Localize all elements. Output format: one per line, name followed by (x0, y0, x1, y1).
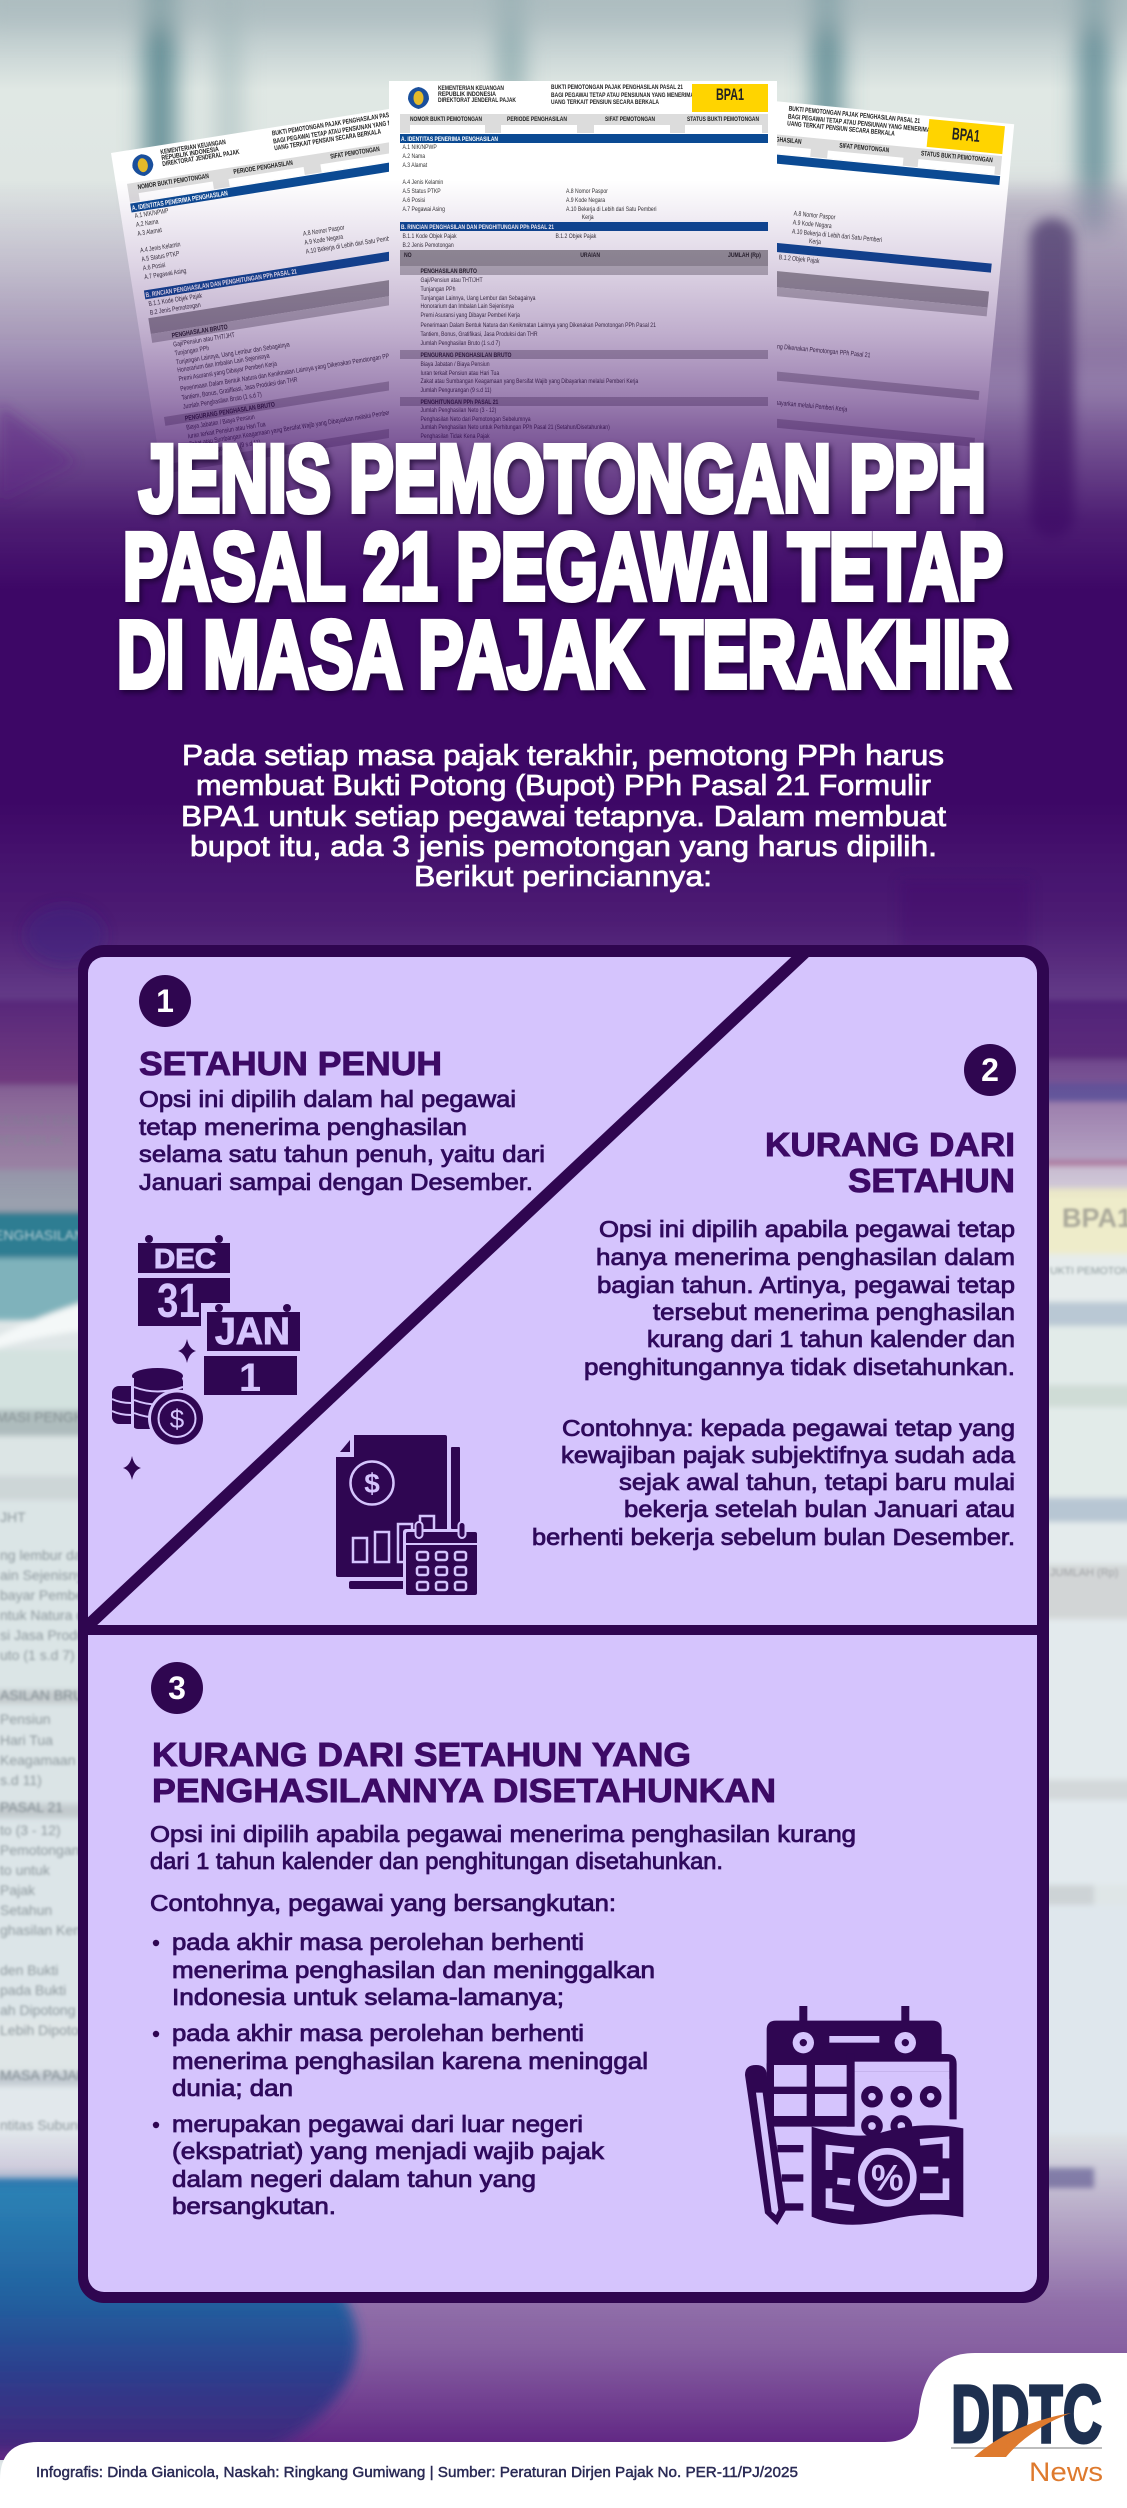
blurred form text, left strip (0, 1112, 147, 2133)
form BPA1: center sheet: REPUBLIK INDONESIA (438, 91, 496, 98)
heading 1: SETAHUN PENUH (139, 1045, 442, 1082)
form BPA1: center sheet: NO (404, 252, 412, 259)
panel fill (88, 957, 1037, 2292)
form BPA1: center sheet: Penerimaan Dalam Bentuk Natura dan Kenikmatan Lainnya yang Dikenakan Pemotongan PPh Pasal 21 (421, 322, 657, 329)
blurred form text, left strip: si Jasa Produksi (0, 1627, 102, 1643)
form BPA1: left sheet: PERIODE PENGHASILAN (233, 160, 293, 176)
blurred form text, left strip: ng lembur dan (0, 1547, 90, 1563)
form BPA1: right sheet: SIFAT PEMOTONGAN (839, 143, 889, 154)
blurred form text, left strip: Pensiun (0, 1711, 51, 1727)
form BPA1: left sheet: A.3 Alamat (137, 227, 163, 238)
blue bottom-left blob (0, 2180, 357, 2450)
form BPA1: center sheet: PENGURANG PENGHASILAN BRUTO (421, 352, 512, 359)
logo: DDTC News (951, 2369, 1103, 2487)
body text 2: berhenti bekerja sebelum bulan Desember. (532, 1524, 1015, 1550)
number badge 3: 3 (168, 1670, 186, 1706)
body text 2: penghitungannya tidak disetahunkan. (584, 1354, 1015, 1380)
number badge 2 (964, 1044, 1016, 1096)
form BPA1: center sheet: A.7 Pegawai Asing (402, 206, 445, 213)
footer white tab (0, 2353, 1127, 2508)
form BPA1: center sheet: NOMOR BUKTI PEMOTONGAN (410, 116, 482, 123)
form BPA1: left sheet: BUKTI PEMOTONGAN PAJAK PENGHASILAN PASAL 21 (271, 110, 403, 138)
form BPA1: left sheet: Tunjangan Lainnya, Uang Lembur dan Sebagainya (176, 342, 291, 367)
form BPA1: left sheet: Tantiem, Bonus, Gratifikasi, Jasa Produksi dan THR (181, 377, 299, 402)
form BPA1: center sheet: KEMENTERIAN KEUANGAN (438, 85, 504, 92)
form BPA1: center sheet: BUKTI PEMOTONGAN PAJAK PENGHASILAN PASAL 21 (551, 84, 683, 91)
form BPA1: right sheet: PERIODE PENGHASILAN (741, 133, 802, 146)
right photo strip (1040, 1000, 1127, 2188)
form BPA1: center sheet: PENGHITUNGAN PPh PASAL 21 (421, 399, 499, 406)
horizontal divider (88, 1625, 1037, 1635)
body text 2: kurang dari 1 tahun kalender dan (647, 1326, 1015, 1352)
form BPA1: center sheet: Biaya Jabatan / Biaya Pensiun (421, 361, 490, 368)
icon: calendar, pencil and tax money (745, 2006, 963, 2225)
form BPA1: center sheet: Jumlah Penghasilan Neto untuk Perhitungan PPh Pasal 21 (Setahun/Disetahunkan) (421, 424, 610, 431)
form BPA1: center sheet: PENGHASILAN BRUTO (421, 268, 477, 275)
form BPA1: left sheet: Jumlah Pengurangan (9 s.d 11) (190, 440, 261, 457)
body text 3: Opsi ini dipilih apabila pegawai menerima penghasilan kurang (150, 1821, 856, 1847)
form BPA1: center sheet: Tunjangan Lainnya, Uang Lembur dan Sebagainya (421, 295, 536, 302)
form BPA1: left sheet: Premi Asuransi yang Dibayar Pemberi Kerja (178, 361, 278, 383)
form BPA1: center sheet: Jumlah Penghasilan Bruto (1 s.d 7) (421, 340, 500, 347)
form BPA1: left sheet: PENGURANG PENGHASILAN BRUTO (185, 402, 276, 423)
bullet list: bersangkutan. (172, 2193, 336, 2219)
form BPA1: center sheet: SIFAT PEMOTONGAN (605, 116, 655, 123)
form BPA1: right sheet: BPA1 (951, 124, 981, 146)
blurred form text, left strip: pada Bukti (0, 1982, 66, 1998)
number badge 1 (139, 975, 191, 1027)
intro paragraph: bupot itu, ada 3 jenis pemotongan yang harus dipilih. (190, 831, 937, 863)
blurred form text, left strip: PASAL 21 (0, 1799, 63, 1815)
icon: document with calendar: $ (364, 1468, 380, 1499)
form BPA1: left sheet: Gaji/Pensiun atau THT/JHT (173, 332, 236, 349)
form BPA1: center sheet: BPA1 (716, 85, 744, 104)
number badge 1: 1 (156, 983, 174, 1019)
icon: calendars and coins: 1 (239, 1356, 261, 1400)
section 1: setahun penuh (112, 975, 545, 1480)
blurred form text, left strip: uto (1 s.d 7) (0, 1647, 75, 1663)
form BPA1: center sheet: B.2 Jenis Pemotongan (402, 242, 454, 249)
form BPA1: left sheet: Penerimaan Dalam Bentuk Natura dan Kenikmatan Lainnya yang Dikenakan Pemotongan PPh Pasal 21 (180, 350, 414, 393)
blurred form text, left strip: to untuk (0, 1862, 51, 1878)
heading 2: KURANG DARI (765, 1126, 1015, 1163)
form BPA1: left sheet: A.2 Nama (136, 219, 160, 229)
form BPA1: center sheet: Tunjangan PPh (421, 286, 455, 293)
heading 3: KURANG DARI SETAHUN YANG (152, 1736, 691, 1773)
form BPA1: center sheet: Penghasilan Tidak Kena Pajak (421, 433, 490, 440)
blurred form text, left strip: Pajak (0, 1882, 36, 1898)
form BPA1: left sheet: A.4 Jenis Kelamin (140, 242, 181, 255)
panel: three withholding options (78, 943, 1049, 2303)
blurred form text, left strip: bayar Pemberi (0, 1587, 91, 1603)
body text 1: Opsi ini dipilih dalam hal pegawai (139, 1086, 516, 1112)
form BPA1: center sheet: Iuran terkait Pensiun atau Hari Tua (421, 370, 500, 377)
blurred form text, left strip: Keagamaan (0, 1752, 76, 1768)
form BPA1: left sheet: A.10 Bekerja di Lebih dari Satu Pemberi (305, 235, 396, 256)
form BPA1: left sheet: A.6 Posisi (143, 262, 166, 273)
form BPA1: right sheet: A.9 Kode Negara (792, 220, 832, 230)
form BPA1: left sheet: REPUBLIK INDONESIA (161, 146, 219, 162)
section 2: kurang dari setahun (336, 1044, 1016, 1598)
form BPA1: center sheet: Penghasilan Neto dari Pemotongan Sebelumnya (421, 416, 531, 423)
blurred pen (1030, 218, 1074, 538)
icon: calendars and coins (112, 1235, 304, 1480)
form BPA1: center sheet: URAIAN (580, 252, 600, 259)
bullet list: dunia; dan (172, 2075, 293, 2101)
body text 1 (139, 1086, 545, 1195)
bullet list: dalam negeri dalam tahun yang (172, 2166, 536, 2192)
bullet list: menerima penghasilan karena meninggal (172, 2048, 648, 2074)
body text 2: tersebut menerima penghasilan (653, 1299, 1015, 1325)
icon: calendars and coins: 31 (157, 1275, 200, 1328)
blurred form text, left strip: MASA PAJAK (0, 2067, 87, 2083)
intro paragraph: BPA1 untuk setiap pegawai tetapnya. Dalam membuat (181, 801, 946, 833)
form BPA1: left sheet: Iuran terkait Pensiun atau Hari Tua (187, 422, 267, 441)
form BPA1: center sheet: Kerja (582, 214, 594, 221)
blurred form text, left strip: MASI PENGHITUNGAN (0, 1409, 147, 1425)
form BPA1: left sheet: A. IDENTITAS PENERIMA PENGHASILAN (131, 190, 228, 212)
form BPA1: center sheet: A.10 Bekerja di Lebih dari Satu Pemberi (566, 206, 657, 213)
form BPA1: center sheet: A.9 Kode Negara (566, 197, 606, 204)
form BPA1: left sheet: A.8 Nomor Paspor (303, 225, 345, 238)
blurred form text, left strip: ntitas Subunit (0, 2117, 85, 2133)
form BPA1: right sheet: Penerimaan Dalam Bentuk Natura dan Kenikmatan Lainnya yang Dikenakan Pemotongan PPh Pasal 21 (636, 330, 871, 360)
form BPA1: center sheet: Jumlah Pengurangan (9 s.d 11) (421, 387, 491, 394)
intro paragraph: Pada setiap masa pajak terakhir, pemotong PPh harus (182, 740, 944, 772)
form BPA1: center sheet: A.5 Status PTKP (402, 188, 441, 195)
form BPA1: center sheet: Tantiem, Bonus, Gratifikasi, Jasa Produksi dan THR (421, 331, 538, 338)
bullet list: Indonesia untuk selama-lamanya; (172, 1984, 564, 2010)
bullet list (153, 1929, 655, 2219)
blurred form text, left strip: to (3 - 12) (0, 1822, 61, 1838)
icon: calendar, pencil and tax money: % (871, 2158, 904, 2199)
body text 3 (150, 1821, 856, 1916)
body text 3: Contohnya, pegawai yang bersangkutan: (150, 1890, 616, 1916)
form BPA1: left sheet: B.1.1 Kode Objek Pajak (148, 293, 203, 308)
form BPA1: left sheet: A.5 Status PTKP (141, 251, 180, 264)
form BPA1: right sheet: BUKTI PEMOTONGAN PAJAK PENGHASILAN PASAL 21 (788, 106, 921, 125)
icon: calendars and coins: JAN (215, 1311, 290, 1353)
purple gradient overlay, bottom (0, 2130, 1127, 2460)
form BPA1: left sheet: BAGI PEGAWAI TETAP ATAU PENSIUNAN YANG MENERIMA (273, 116, 415, 145)
bullet list: menerima penghasilan dan meninggalkan (172, 1957, 655, 1983)
heading 3: PENGHASILANNYA DISETAHUNKAN (152, 1772, 776, 1809)
form BPA1: left sheet: Honorarium dan Imbalan Lain Sejenisnya (177, 353, 271, 375)
form BPA1: center sheet: B.1.2 Objek Pajak (556, 233, 597, 240)
blurred form text, left strip: Setahun (0, 1902, 52, 1918)
form BPA1: left sheet: B. RINCIAN PENGHASILAN DAN PENGHITUNGAN PPh PASAL 21 (145, 268, 298, 299)
form BPA1: center sheet: STATUS BUKTI PEMOTONGAN (687, 116, 759, 123)
form BPA1: left sheet: Zakat atau Sumbangan Keagamaan yang Bersifat Wajib yang Dibayarkan melalui Pemberi Kerja (189, 408, 405, 449)
form BPA1: center sheet: Gaji/Pensiun atau THT/JHT (421, 277, 483, 284)
blurred BPA1 label, right strip: JUMLAH (Rp) (1050, 1567, 1118, 1579)
blurred form text, left strip: s.d 11) (0, 1772, 42, 1788)
form BPA1: left sheet: Jumlah Penghasilan Bruto (1 s.d 7) (183, 392, 262, 411)
left photo strip (0, 1000, 90, 2240)
form BPA1: left sheet: B.2 Jenis Pemotongan (150, 302, 201, 317)
body text 2: bekerja setelah bulan Januari atau (624, 1496, 1015, 1522)
form BPA1: center sheet: B. RINCIAN PENGHASILAN DAN PENGHITUNGAN PPh PASAL 21 (401, 224, 554, 231)
purple gradient overlay, top (0, 0, 1127, 1200)
form BPA1: center sheet: Zakat atau Sumbangan Keagamaan yang Bersifat Wajib yang Dibayarkan melalui Pemberi Kerja (421, 378, 639, 385)
bullet list: pada akhir masa perolehan berhenti (172, 1929, 584, 1955)
form BPA1: center sheet (389, 81, 777, 551)
form BPA1: left sheet: SIFAT PEMOTONGAN (330, 146, 380, 161)
form BPA1: left sheet: Biaya Jabatan / Biaya Pensiun (186, 414, 255, 432)
blurred form text, left strip: den Bukti (0, 1962, 58, 1978)
form BPA1: center sheet: UANG TERKAIT PENSIUN SECARA BERKALA (551, 99, 659, 106)
number badge 3 (151, 1662, 203, 1714)
intro paragraph: Berikut perinciannya: (414, 861, 712, 893)
form BPA1: center sheet: A.1 NIK/NPWP (402, 144, 437, 151)
blurred form text, left strip: ntuk Natura dan (0, 1607, 100, 1623)
form BPA1: left sheet: PENGHASILAN BRUTO (171, 324, 229, 340)
blurred form text, left strip: ain Sejenisnya (0, 1567, 91, 1583)
footer credit: Infografis: Dinda Gianicola, Naskah: Ringkang Gumiwang | Sumber: Peraturan Dirjen Pajak No. PER-11/PJ/2025 (36, 2464, 798, 2481)
form BPA1: left sheet: Tunjangan PPh (174, 346, 210, 358)
heading 3 (152, 1736, 776, 1809)
blurred form text, left strip: Lebih Dipotong (0, 2022, 94, 2038)
intro paragraph (181, 740, 946, 893)
form BPA1: center sheet: A.2 Nama (402, 153, 426, 160)
body text 2: Opsi ini dipilih apabila pegawai tetap (599, 1216, 1015, 1242)
form BPA1: center sheet: DIREKTORAT JENDERAL PAJAK (438, 97, 516, 104)
form BPA1: left sheet: DIREKTORAT JENDERAL PAJAK (162, 149, 240, 168)
form BPA1: center sheet: A.4 Jenis Kelamin (402, 179, 443, 186)
form BPA1: right sheet: BAGI PEGAWAI TETAP ATAU PENSIUNAN YANG MENERIMA (788, 113, 931, 134)
body text 2: hanya menerima penghasilan dalam (596, 1244, 1015, 1270)
form BPA1: right sheet: STATUS BUKTI PEMOTONGAN (921, 150, 993, 164)
bullet list: (ekspatriat) yang menjadi wajib pajak (172, 2138, 605, 2164)
form BPA1: right sheet: B.1.2 Objek Pajak (778, 255, 821, 265)
blurred office windows (0, 0, 1127, 370)
blurred form text, left strip: ah Dipotong (0, 2002, 76, 2018)
bullet list: merupakan pegawai dari luar negeri (172, 2111, 583, 2137)
title (117, 426, 1010, 708)
form BPA1: right sheet (583, 87, 1014, 592)
form BPA1: center sheet: Premi Asuransi yang Dibayar Pemberi Kerja (421, 312, 520, 319)
form BPA1: center sheet: JUMLAH (Rp) (728, 252, 761, 259)
blurred form text, left strip: Hari Tua (0, 1732, 53, 1748)
form BPA1: right sheet: JUMLAH (Rp) (924, 291, 956, 301)
form BPA1: center sheet: A.3 Alamat (402, 162, 427, 169)
icon: document with calendar (336, 1435, 480, 1598)
number badge 2: 2 (981, 1052, 999, 1088)
body text 2 (532, 1216, 1015, 1550)
form BPA1: center sheet: A.8 Nomor Paspor (566, 188, 608, 195)
intro paragraph: membuat Bukti Potong (Bupot) PPh Pasal 21 Formulir (196, 770, 931, 802)
form BPA1: left sheet: NOMOR BUKTI PEMOTONGAN (137, 173, 209, 191)
form BPA1: right sheet: Zakat atau Sumbangan Keagamaan yang Bersifat Wajib yang Dibayarkan melalui Pemberi Kerja (630, 386, 848, 414)
form BPA1: center sheet: Jumlah Penghasilan Neto (3 - 12) (421, 407, 496, 414)
heading 2: SETAHUN (848, 1162, 1015, 1199)
form BPA1: left sheet (111, 92, 568, 617)
body text 2: kewajiban pajak subjektifnya sudah ada (561, 1442, 1015, 1468)
form BPA1: center sheet: BAGI PEGAWAI TETAP ATAU PENSIUNAN YANG MENERIMA (551, 92, 694, 99)
section 3: kurang dari setahun yang penghasilannya disetahunkan (150, 1662, 963, 2225)
body text 1: tetap menerima penghasilan (139, 1114, 467, 1140)
form BPA1: right sheet: A.8 Nomor Paspor (793, 211, 836, 222)
blurred form text, left strip: JHT (0, 1509, 26, 1525)
heading 2 (765, 1126, 1015, 1199)
form BPA1: left sheet: A.1 NIK/NPWP (134, 208, 169, 220)
blurred form text, left strip: ASILAN BRUTO (0, 1687, 103, 1703)
form BPA1: center sheet: Honorarium dan Imbalan Lain Sejenisnya (421, 303, 514, 310)
body text 2: sejak awal tahun, tetapi baru mulai (619, 1469, 1015, 1495)
icon: calendars and coins: DEC (154, 1243, 216, 1274)
icon: calendars and coins: $ (170, 1404, 185, 1434)
form BPA1: left sheet: A.7 Pegawai Asing (144, 268, 187, 282)
blurred BPA1 label, right strip (1050, 1203, 1127, 1579)
form BPA1: center sheet: PERIODE PENGHASILAN (507, 116, 567, 123)
form BPA1: left sheet: A.9 Kode Negara (304, 234, 344, 247)
body text 2: Contohnya: kepada pegawai tetap yang (562, 1415, 1015, 1441)
form BPA1: left sheet: KEMENTERIAN KEUANGAN (160, 139, 226, 156)
soft shapes under the title (0, 405, 1030, 965)
blurred form text, left strip: Pemotongan (0, 1842, 79, 1858)
body text 2: bagian tahun. Artinya, pegawai tetap (597, 1272, 1015, 1298)
body text 1: selama satu tahun penuh, yaitu dari (139, 1141, 545, 1167)
form BPA1: center sheet: A. IDENTITAS PENERIMA PENGHASILAN (401, 136, 498, 143)
form BPA1: right sheet: A.10 Bekerja di Lebih dari Satu Pemberi (792, 229, 882, 244)
blurred form text, left strip: ghasilan Kena (0, 1922, 89, 1938)
body text 1: Januari sampai dengan Desember. (139, 1169, 533, 1195)
panel frame (78, 945, 1049, 2303)
form BPA1: center sheet: A.6 Posisi (402, 197, 425, 204)
logo word: News (1029, 2457, 1103, 2487)
diagonal divider (80, 943, 815, 1633)
form BPA1: right sheet: Kerja (809, 239, 822, 246)
form BPA1: right sheet: UANG TERKAIT PENSIUN SECARA BERKALA (787, 120, 895, 138)
body text 3: dari 1 tahun kalender dan penghitungan disetahunkan. (150, 1848, 723, 1874)
bullet list: pada akhir masa perolehan berhenti (172, 2020, 584, 2046)
form BPA1: center sheet: B.1.1 Kode Objek Pajak (402, 233, 457, 240)
logo swoosh (974, 2413, 1071, 2457)
form BPA1: left sheet: UANG TERKAIT PENSIUN SECARA BERKALA (274, 129, 382, 152)
